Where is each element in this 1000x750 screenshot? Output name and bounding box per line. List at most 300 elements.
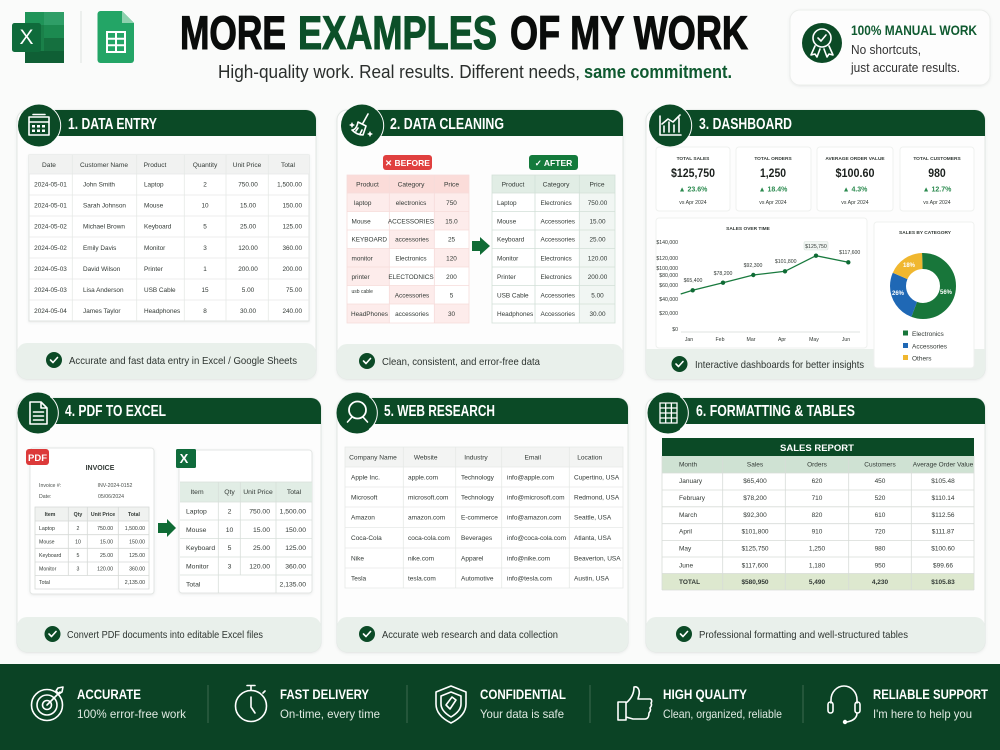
table: excel output: Qty — [224, 489, 235, 496]
table: before: accessories — [395, 236, 429, 244]
badge: 100% manual work: No shortcuts, — [851, 42, 921, 57]
table: data entry: 360.00 — [282, 245, 302, 252]
icon: Excel logo: X — [19, 26, 34, 49]
table: after: Accessories — [540, 311, 575, 318]
table: sales report: $111.87 — [932, 528, 955, 536]
table: data entry: 125.00 — [282, 224, 302, 230]
document: pdf invoice: Date: — [39, 494, 51, 500]
table: before: laptop — [354, 200, 372, 207]
table: before: 25 — [448, 236, 455, 244]
line chart: sales over time: $80,000 — [659, 273, 678, 279]
table: excel output: Total — [287, 489, 302, 496]
panel: data entry — [17, 104, 316, 379]
document: pdf invoice: Invoice #: — [39, 483, 61, 489]
table: sales report: 950 — [875, 562, 886, 570]
table: sales report: $105.48 — [931, 478, 955, 485]
callout: dashboard: Interactive dashboards for better insights — [695, 359, 864, 371]
kpi: total sales: $125,750 — [671, 166, 715, 180]
table: sales report: $99.66 — [933, 562, 953, 570]
table: data entry: James Taylor — [83, 308, 121, 315]
feature: accurate: ACCURATE — [77, 687, 141, 702]
table: data entry: Michael Brown — [83, 224, 125, 230]
table: sales report: June — [679, 562, 693, 570]
table: web research: Seattle, USA — [574, 514, 612, 522]
table: before: Price — [444, 182, 459, 188]
table: after: Monitor — [497, 256, 519, 262]
table: excel output: 125.00 — [285, 545, 306, 552]
table: sales report: May — [679, 546, 692, 552]
kpi: total orders: TOTAL ORDERS — [754, 156, 792, 162]
feature: reliable support: I'm here to help you — [873, 707, 972, 721]
table: sales report: March — [679, 512, 697, 519]
table: web research: info@tesla.com — [507, 576, 552, 582]
kpi: total orders: 1,250 — [760, 166, 786, 180]
table: web research: info@microsoft.com — [507, 494, 565, 502]
feature: high quality: Clean, organized, reliable — [663, 707, 782, 721]
donut chart: sales by category: Electronics — [912, 331, 945, 338]
table: web research: Apple Inc. — [351, 474, 380, 482]
table: after: Product — [502, 182, 525, 188]
table: data entry: Lisa Anderson — [83, 287, 124, 294]
badge: 100% manual work: 100% MANUAL WORK — [851, 22, 977, 38]
title: MORE — [180, 6, 286, 59]
line chart: sales over time: $92,300 — [744, 263, 762, 269]
table: web research: Technology — [461, 474, 495, 482]
table: data entry: 120.00 — [238, 245, 258, 252]
icon: target — [32, 687, 63, 720]
icon: Google Sheets logo — [98, 11, 134, 63]
document: pdf invoice: 120.00 — [97, 567, 113, 573]
table: excel output: 25.00 — [253, 545, 270, 552]
callout: web research — [337, 617, 628, 652]
table: data entry: 2024-05-04 — [34, 308, 67, 315]
heading: 1. DATA ENTRY — [68, 116, 158, 133]
icon: excel badge: X — [180, 451, 189, 466]
table: after: Laptop — [497, 200, 517, 207]
table: sales report: 450 — [875, 478, 886, 485]
table: data entry: Printer — [144, 266, 164, 273]
table: excel output: 3 — [228, 564, 232, 570]
kpi: total orders: vs Apr 2024 — [759, 200, 787, 206]
document: pdf invoice: 150.00 — [129, 540, 145, 546]
kpi: total customers: 980 — [928, 166, 946, 180]
table: sales report: $92,300 — [743, 512, 767, 519]
donut chart: sales by category — [874, 222, 974, 368]
table: before: 30 — [448, 311, 455, 318]
donut chart: sales by category: 18% — [903, 263, 916, 269]
table: after: 30.00 — [590, 311, 606, 318]
table: sales report: Month — [679, 462, 697, 468]
table: web research: Beverages — [461, 535, 493, 542]
table: web research: apple.com — [408, 474, 438, 482]
callout: formatting: Professional formatting and well-structured tables — [699, 629, 908, 641]
line chart: sales over time: Jan — [685, 337, 693, 343]
label: before: ✕ BEFORE — [385, 158, 430, 168]
icon: stopwatch — [236, 686, 266, 722]
donut chart: sales by category: SALES BY CATEGORY — [899, 230, 952, 236]
feature: reliable support — [828, 686, 989, 724]
table: web research: info@nike.com — [507, 556, 550, 562]
table: web research — [345, 447, 623, 588]
subtitle: High-quality work. Real results. Different needs, — [218, 62, 580, 82]
callout: formatting — [646, 617, 985, 652]
table: data entry: 15 — [201, 287, 209, 294]
table: data entry: Unit Price — [233, 162, 262, 169]
document: pdf invoice — [30, 448, 154, 594]
title: EXAMPLES — [298, 6, 497, 59]
kpi: total sales: ▲ 23.6% — [679, 186, 708, 194]
table: data entry: Sarah Johnson — [83, 202, 126, 210]
table: sales report: April — [679, 528, 693, 536]
feature: high quality: HIGH QUALITY — [663, 687, 747, 702]
table: web research: Beaverton, USA — [574, 556, 621, 562]
kpi: total customers — [900, 147, 974, 211]
table: web research: Amazon — [351, 514, 375, 522]
table: data entry: Quantity — [193, 162, 218, 169]
document: pdf invoice: 1,500.00 — [125, 526, 145, 532]
table: data entry: 2024-05-02 — [34, 224, 67, 230]
table: excel output: 5 — [228, 545, 232, 552]
line chart: sales over time: Feb — [716, 337, 725, 343]
document: pdf invoice: 10 — [75, 540, 81, 546]
table: sales report: 820 — [812, 512, 823, 519]
table: after: Keyboard — [497, 236, 525, 244]
document: pdf invoice: Unit Price — [91, 512, 115, 518]
table: excel output: 1,500.00 — [280, 508, 306, 516]
label: after: ✓ AFTER — [535, 158, 572, 168]
table: sales report: 5,490 — [809, 579, 826, 586]
icon: shield — [436, 686, 466, 723]
table: data entry: 30.00 — [240, 308, 256, 315]
table: excel output: 2 — [228, 508, 232, 516]
line chart: sales over time: Mar — [747, 337, 756, 343]
callout: web research: Accurate web research and data collection — [382, 629, 558, 641]
label: before — [383, 155, 432, 170]
badge: 100% manual work: just accurate results. — [850, 60, 960, 75]
table: web research: tesla.com — [408, 576, 436, 582]
table: web research: nike.com — [408, 556, 434, 562]
table: sales report: SALES REPORT — [780, 443, 854, 454]
table: sales report: 620 — [812, 478, 823, 485]
table: before: 750 — [446, 200, 457, 207]
table: data entry: 10 — [201, 202, 209, 210]
table: excel output: Mouse — [186, 527, 207, 534]
table: data entry: 15.00 — [240, 202, 256, 210]
donut chart: sales by category: 56% — [940, 290, 953, 296]
table: after: Electronics — [540, 200, 572, 207]
line chart: sales over time: May — [809, 337, 819, 343]
table: data entry: 1,500.00 — [277, 182, 302, 188]
table: after: 25.00 — [590, 236, 606, 244]
document: pdf invoice: 2,135.00 — [125, 580, 145, 586]
table: before: 200 — [446, 274, 457, 281]
table: before: monitor — [352, 256, 374, 262]
table: excel output: Total — [186, 582, 201, 588]
table: web research: amazon.com — [408, 514, 445, 522]
table: web research: coca-cola.com — [408, 535, 450, 542]
table: after: Accessories — [540, 218, 575, 226]
icon: pdf badge — [26, 449, 49, 465]
kpi: average order value: vs Apr 2024 — [841, 200, 869, 206]
line chart: sales over time: $0 — [672, 327, 678, 333]
table: excel output: 360.00 — [285, 564, 306, 570]
table: data entry: Product — [144, 162, 167, 169]
icon: table grid — [648, 392, 688, 434]
feature: accurate — [32, 687, 187, 721]
line chart: sales over time: $140,000 — [656, 240, 678, 246]
table: data entry: 3 — [203, 245, 207, 252]
table: sales report: January — [679, 478, 703, 485]
table: web research: Coca-Cola — [351, 535, 382, 542]
document: pdf invoice: 360.00 — [129, 567, 145, 573]
table: data entry: Monitor — [144, 245, 166, 252]
line chart: sales over time: SALES OVER TIME — [726, 226, 771, 232]
icon: calendar — [18, 104, 61, 146]
feature: confidential: Your data is safe — [480, 707, 564, 721]
heading: 6. FORMATTING & TABLES — [696, 403, 855, 420]
kpi: total orders: ▲ 18.4% — [759, 186, 788, 194]
callout: data cleaning: Clean, consistent, and error-free data — [382, 356, 540, 368]
title: OF MY WORK — [510, 6, 748, 59]
line chart: sales over time: $65,400 — [684, 278, 702, 284]
table: web research: info@amazon.com — [507, 514, 561, 522]
icon: thumbs up — [618, 687, 652, 720]
table: before: Electronics — [395, 256, 427, 262]
document: pdf invoice: 15.00 — [100, 540, 113, 546]
heading: 3. DASHBOARD — [699, 116, 792, 133]
table: sales report: Average Order Value — [913, 462, 974, 468]
table: sales report: Customers — [864, 462, 896, 468]
table: data entry: 2024-05-03 — [34, 266, 67, 273]
table: after: USB Cable — [497, 292, 529, 300]
table: excel output: Item — [190, 489, 204, 496]
table: web research: Technology — [461, 494, 495, 502]
table: after: 750.00 — [588, 200, 608, 207]
donut chart: sales by category: 26% — [892, 291, 905, 297]
icon: headset — [828, 686, 860, 724]
callout: data entry — [17, 343, 316, 379]
panel: web research — [336, 392, 628, 652]
table: data entry: Customer Name — [80, 162, 128, 169]
icon: broom — [341, 104, 384, 146]
table: sales report: Sales — [747, 462, 764, 468]
document: pdf invoice: Keyboard — [39, 553, 61, 559]
table: data entry: 75.00 — [286, 287, 302, 294]
document: pdf invoice: 25.00 — [100, 553, 113, 559]
table: after: Printer — [497, 274, 517, 281]
table: sales report: $101,800 — [741, 528, 769, 536]
icon: document — [18, 392, 58, 434]
line chart: sales over time: $125,750 — [805, 244, 827, 250]
arrow: pdf to excel — [158, 519, 176, 537]
table: data entry: Date — [42, 162, 56, 169]
heading: 5. WEB RESEARCH — [384, 403, 495, 420]
table: before: ELECTODNICS — [388, 274, 434, 281]
table: data entry: Keyboard — [144, 224, 172, 230]
table: sales report: $112.56 — [931, 512, 955, 519]
feature: accurate: 100% error-free work — [77, 707, 187, 721]
table: before: Accessories — [395, 292, 429, 300]
table: web research: Tesla — [351, 576, 367, 582]
kpi: total sales: TOTAL SALES — [677, 156, 710, 162]
panel: pdf to excel — [17, 392, 321, 652]
feature: confidential: CONFIDENTIAL — [480, 687, 566, 702]
document: pdf invoice: Total — [39, 580, 50, 586]
table: sales report: 980 — [875, 546, 886, 552]
table: before: Category — [398, 182, 425, 188]
table: web research: Email — [524, 454, 541, 462]
table: after: Accessories — [540, 292, 575, 300]
table: before: Product — [356, 182, 379, 188]
table: web research: E-commerce — [461, 514, 498, 522]
table: sales report: 4,230 — [872, 579, 889, 586]
table: web research: Industry — [464, 454, 488, 462]
line chart: sales over time: $101,800 — [775, 259, 797, 265]
table: data entry: David Wilson — [83, 266, 121, 273]
table: after — [492, 175, 615, 323]
kpi: average order value: $100.60 — [836, 166, 875, 180]
kpi: total sales: vs Apr 2024 — [679, 200, 707, 206]
callout: dashboard — [646, 349, 985, 379]
callout: pdf to excel — [17, 617, 321, 652]
table: excel output: Unit Price — [243, 489, 273, 496]
table: before: KEYBOARD — [352, 236, 387, 244]
table: after: 200.00 — [588, 274, 608, 281]
table: data entry: 240.00 — [282, 308, 302, 315]
table: sales report: 1,180 — [809, 562, 826, 570]
document: pdf invoice: 2 — [77, 526, 80, 532]
arrow: before to after — [472, 237, 490, 255]
table: data entry: 2024-05-01 — [34, 202, 67, 210]
table: web research: Automotive — [461, 576, 494, 582]
table: web research: Company Name — [349, 454, 397, 462]
table: web research: info@apple.com — [507, 474, 554, 482]
table: web research: Cupertino, USA — [574, 474, 620, 482]
table: before — [347, 175, 469, 323]
icon: award ribbon — [802, 23, 842, 63]
table: sales report: February — [679, 495, 706, 502]
table: excel output: 10 — [226, 527, 233, 534]
panel: data cleaning — [337, 104, 623, 379]
kpi: total customers: vs Apr 2024 — [923, 200, 951, 206]
callout: data entry: Accurate and fast data entry in Excel / Google Sheets — [69, 355, 297, 367]
table: web research: Atlanta, USA — [574, 535, 612, 542]
kpi: average order value: ▲ 4.3% — [843, 186, 868, 194]
table: sales report: 610 — [875, 512, 886, 519]
document: pdf invoice: Mouse — [39, 540, 55, 546]
table: after: Mouse — [497, 218, 517, 226]
table: sales report: $125,750 — [741, 546, 769, 552]
table: excel output: 150.00 — [285, 527, 306, 534]
document: pdf invoice: Laptop — [39, 526, 55, 532]
document: pdf invoice: INV-2024-0152 — [98, 483, 133, 489]
table: data entry: Emily Davis — [83, 245, 116, 252]
line chart: sales over time: Apr — [778, 337, 786, 343]
table: after: 5.00 — [591, 292, 604, 300]
table: after: Electronics — [540, 274, 572, 281]
label: after — [529, 155, 578, 170]
table: before: 15.0 — [445, 218, 458, 226]
table: data entry: 200.00 — [238, 266, 258, 273]
table: sales report: 720 — [875, 528, 886, 536]
heading: 4. PDF TO EXCEL — [65, 403, 166, 420]
line chart: sales over time: $100,000 — [656, 266, 678, 272]
table: after: Headphones — [497, 311, 533, 318]
subtitle: same commitment. — [584, 62, 732, 82]
table: sales report: $117,600 — [742, 562, 769, 570]
document: pdf invoice: Item — [45, 512, 56, 518]
table: before: 5 — [450, 292, 454, 300]
donut chart: sales by category: Accessories — [912, 344, 948, 350]
table: data entry: 750.00 — [238, 182, 258, 188]
document: pdf invoice: 5 — [77, 553, 80, 559]
document: pdf invoice: Qty — [74, 512, 82, 518]
table: data entry: Total — [281, 162, 295, 169]
feature: fast delivery: FAST DELIVERY — [280, 687, 369, 702]
donut chart: sales by category: Others — [912, 356, 932, 362]
panel: dashboard — [646, 104, 985, 379]
table: web research: Microsoft — [351, 494, 378, 502]
document: pdf invoice: 3 — [77, 567, 80, 573]
table: excel output: 2,135.00 — [280, 582, 306, 588]
icon: magnifier — [336, 392, 378, 434]
feature: fast delivery — [236, 686, 380, 722]
table: sales report: $100.60 — [931, 546, 955, 552]
table: web research: Apparel — [461, 556, 484, 562]
table: data entry: Mouse — [144, 202, 164, 210]
table: web research: Austin, USA — [574, 576, 610, 582]
table: after: 120.00 — [588, 256, 608, 262]
table: excel output: Keyboard — [186, 545, 215, 552]
kpi: total sales — [656, 147, 730, 211]
table: data entry: 2024-05-03 — [34, 287, 67, 294]
table: after: Category — [543, 182, 570, 188]
table: data entry: 5 — [203, 224, 207, 230]
table: sales report: 520 — [875, 495, 886, 502]
table: sales report: 1,250 — [809, 546, 826, 552]
table: after: Accessories — [540, 236, 575, 244]
table: after: 15.00 — [590, 218, 606, 226]
table: sales report: Orders — [807, 462, 828, 468]
table: data entry: 5.00 — [242, 287, 255, 294]
panel: formatting and tables — [646, 392, 985, 652]
feature: high quality — [618, 687, 782, 721]
table: before: HeadPhones — [351, 311, 388, 318]
kpi: average order value: AVERAGE ORDER VALUE — [825, 156, 885, 162]
table: web research: Website — [414, 454, 438, 462]
table: after: Price — [589, 182, 605, 188]
table: data entry: 150.00 — [282, 202, 302, 210]
table: web research: Location — [577, 454, 602, 462]
table: before: accessories — [395, 311, 429, 318]
icon: growth chart — [649, 104, 692, 146]
table: excel output — [179, 450, 312, 593]
table: before: ACCESSORIES — [388, 218, 434, 226]
table: data entry: 25.00 — [240, 224, 256, 230]
heading: 2. DATA CLEANING — [390, 116, 504, 133]
footer band — [0, 664, 1000, 750]
line chart: sales over time: $20,000 — [659, 311, 678, 317]
icon: pdf badge: PDF — [28, 453, 47, 464]
callout: data cleaning — [337, 344, 623, 379]
feature: fast delivery: On-time, every time — [280, 707, 380, 721]
table: excel output: Laptop — [186, 508, 207, 516]
document: pdf invoice: Monitor — [39, 567, 57, 573]
table: data entry: 8 — [203, 308, 207, 315]
kpi: total orders — [736, 147, 811, 211]
table: excel output: 750.00 — [249, 508, 270, 516]
table: sales report: $65,400 — [743, 478, 767, 485]
